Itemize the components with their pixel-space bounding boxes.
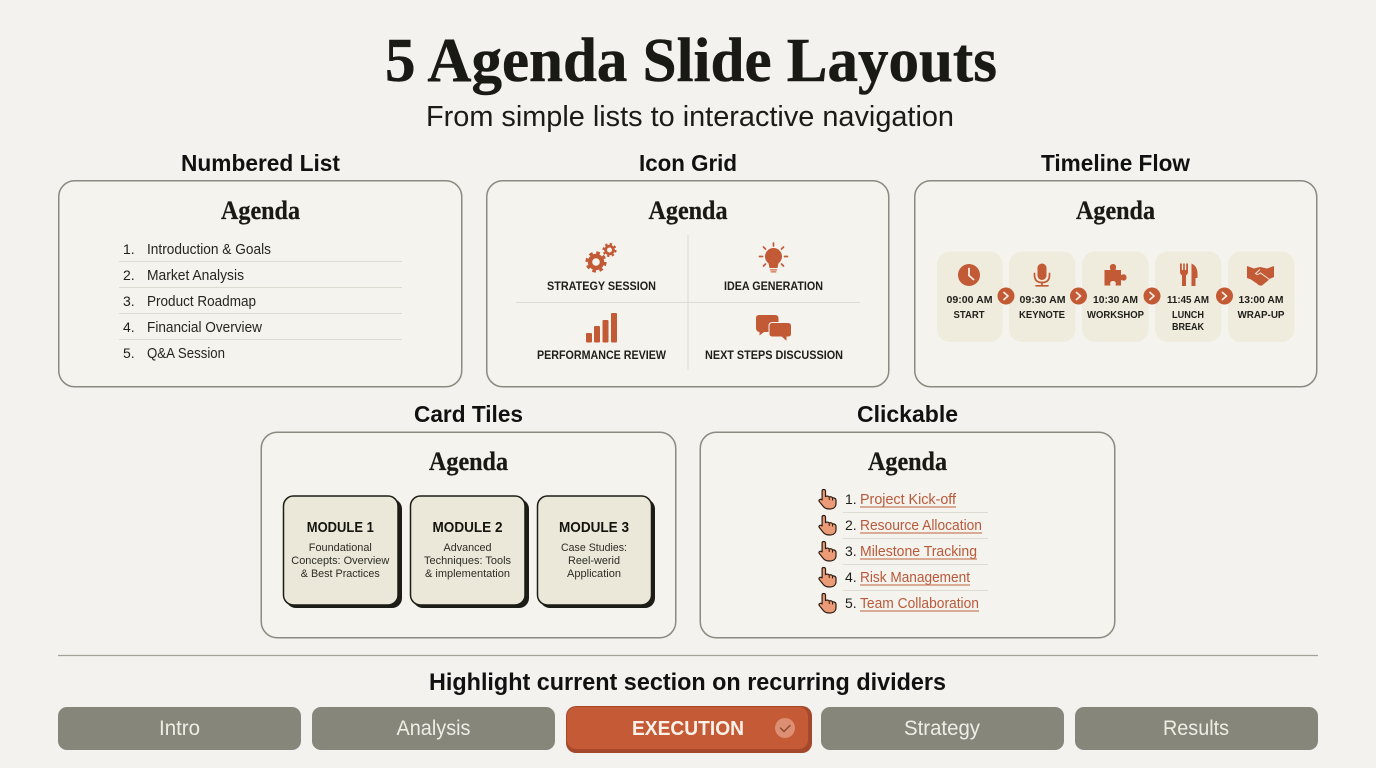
- label: Next Steps Discussion: NEXT STEPS DISCUSSION: [705, 348, 843, 362]
- card: Module 3: Reel-werid: [568, 555, 620, 567]
- timeline step 4: 11:45 AM: [1167, 294, 1209, 306]
- link row 2: [819, 516, 982, 535]
- timeline step 2: KEYNOTE: [1019, 309, 1065, 321]
- list item 3: Product Roadmap: [147, 294, 256, 310]
- card: Module 1: Concepts: Overview: [291, 555, 389, 567]
- link row 5: Team Collaboration: [860, 596, 979, 612]
- list item 5: [123, 345, 225, 362]
- label: Idea Generation: IDEA GENERATION: [724, 279, 823, 293]
- panel: Numbered List: [59, 181, 462, 387]
- link row 3: Milestone Tracking: [860, 544, 977, 560]
- section tab: Strategy: Strategy: [904, 717, 980, 740]
- icon: puzzle piece: [1104, 264, 1126, 286]
- panel title: Agenda: [868, 447, 947, 476]
- icon: fork and knife: [1180, 264, 1198, 286]
- list item 5: 5.: [123, 345, 135, 361]
- panel title: Agenda: [1076, 196, 1155, 225]
- list item 4: 4.: [123, 319, 135, 335]
- timeline step 4: [1155, 252, 1222, 342]
- link row 5: [819, 594, 979, 613]
- icon: gears: [587, 244, 616, 271]
- link row 3: [819, 542, 977, 561]
- panel: Icon Grid: [487, 181, 889, 387]
- heading: Icon Grid: Icon Grid: [639, 150, 737, 176]
- list item 1: 1.: [123, 241, 135, 257]
- subtitle: From simple lists to interactive navigation: [426, 101, 954, 133]
- timeline step 1: [937, 252, 1002, 342]
- card: Module 1: [284, 496, 402, 608]
- panel: Timeline Flow: [915, 181, 1317, 387]
- section tab: Intro: Intro: [159, 717, 200, 740]
- card: Module 2: [410, 496, 529, 608]
- icon: chat bubbles: [756, 315, 792, 342]
- section tab: Analysis: Analysis: [396, 717, 470, 740]
- section tab: Execution (active): [566, 706, 812, 753]
- label: Strategy Session: STRATEGY SESSION: [547, 279, 656, 293]
- icon: handshake: [1247, 266, 1274, 286]
- timeline step 4: LUNCH: [1172, 309, 1204, 321]
- heading: Clickable: Clickable: [857, 401, 958, 427]
- list item 2: 2.: [123, 267, 135, 283]
- icon: light bulb: [760, 243, 788, 273]
- section tab: Strategy: [821, 707, 1064, 750]
- timeline step 3: 10:30 AM: [1093, 294, 1138, 306]
- section tab: Analysis: [312, 707, 555, 750]
- list item 2: Market Analysis: [147, 268, 244, 284]
- list item 1: Introduction & Goals: [147, 242, 271, 258]
- link row 2: Resource Allocation: [860, 518, 982, 534]
- card: Module 2: Techniques: Tools: [424, 555, 511, 567]
- arrow 1: [998, 288, 1014, 304]
- title: 5 Agenda Slide Layouts: [385, 27, 997, 95]
- link row 4: Risk Management: [860, 570, 970, 586]
- card: Module 3: Application: [567, 568, 621, 580]
- card: Module 3: [538, 496, 655, 608]
- timeline step 1: START: [954, 309, 985, 321]
- panel: Clickable: [700, 432, 1115, 638]
- card: Module 1: MODULE 1: [307, 519, 374, 536]
- card: Module 1: & Best Practices: [301, 568, 380, 580]
- link row 1: Project Kick-off: [860, 492, 957, 508]
- icon: clock: [958, 264, 980, 286]
- heading: Numbered List: Numbered List: [181, 150, 340, 176]
- timeline step 3: WORKSHOP: [1087, 309, 1144, 321]
- link row 1: 1.: [845, 491, 857, 507]
- timeline step 5: 13:00 AM: [1238, 294, 1284, 306]
- arrow 3: [1144, 288, 1160, 304]
- timeline step 5: [1228, 252, 1294, 342]
- timeline step 3: [1082, 252, 1148, 342]
- section tab: Results: [1075, 707, 1318, 750]
- card: Module 3: Case Studies:: [561, 542, 627, 554]
- link row 4: [819, 568, 970, 587]
- panel title: Agenda: [648, 196, 728, 225]
- timeline step 4: BREAK: [1172, 321, 1204, 333]
- icon: microphone: [1034, 264, 1050, 286]
- panel: Card Tiles: [261, 432, 676, 638]
- link row 1: [819, 490, 957, 509]
- link row 2: 2.: [845, 517, 857, 533]
- card: Module 2: & implementation: [425, 568, 510, 580]
- list item 4: Financial Overview: [147, 320, 262, 336]
- link row 5: 5.: [845, 595, 857, 611]
- list item 5: Q&A Session: [147, 346, 225, 362]
- heading: Card Tiles: Card Tiles: [414, 401, 523, 427]
- heading: recurring dividers: Highlight current section on recurring dividers: [429, 669, 946, 696]
- card: Module 2: MODULE 2: [432, 519, 502, 536]
- heading: Timeline Flow: Timeline Flow: [1041, 150, 1190, 176]
- list item 3: 3.: [123, 293, 135, 309]
- panel title: Agenda: [429, 447, 508, 476]
- panel title: Agenda: [221, 196, 300, 225]
- card: Module 2: Advanced: [444, 542, 492, 554]
- label: Performance Review: PERFORMANCE REVIEW: [537, 348, 667, 362]
- timeline step 2: 09:30 AM: [1020, 294, 1066, 306]
- link row 3: 3.: [845, 543, 857, 559]
- section tab: Execution (active): EXECUTION: [632, 718, 744, 740]
- icon: check badge: [775, 718, 795, 738]
- timeline step 1: 09:00 AM: [946, 294, 993, 306]
- link row 4: 4.: [845, 569, 857, 585]
- arrow 4: [1216, 288, 1233, 304]
- arrow 2: [1070, 288, 1087, 304]
- icon: bar chart: [586, 313, 617, 342]
- section tab: Results: Results: [1163, 717, 1229, 740]
- timeline step 2: [1009, 252, 1076, 342]
- timeline step 5: WRAP-UP: [1238, 309, 1284, 321]
- section tab: Intro: [58, 707, 301, 750]
- card: Module 1: Foundational: [309, 542, 372, 554]
- card: Module 3: MODULE 3: [559, 519, 629, 536]
